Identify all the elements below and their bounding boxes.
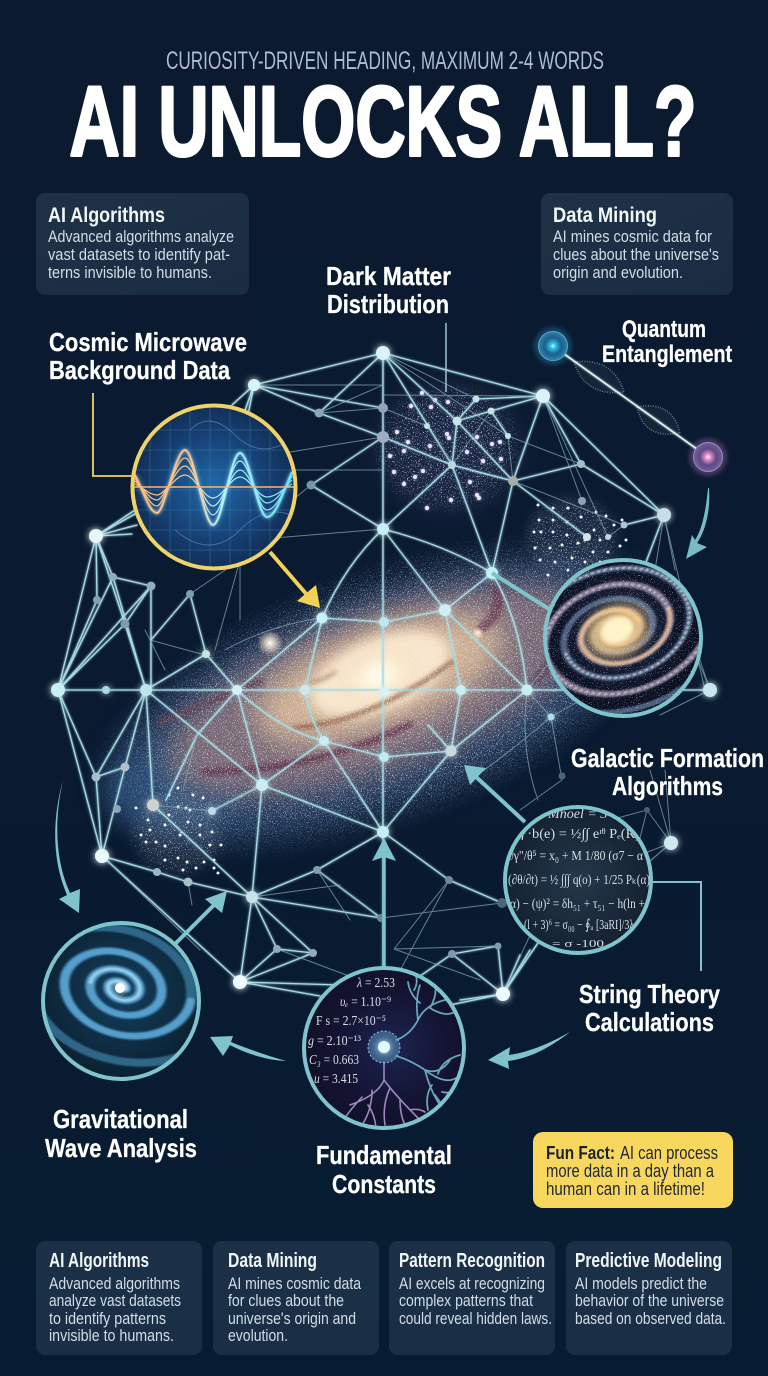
circle: string theory equations: α) − (ψ)² = δh₅₁ + τ₅₁ − h(ln + bbox=[510, 897, 645, 912]
card: Pattern Recognition bbox=[389, 1241, 555, 1355]
label: String Theory Calculations: Calculations bbox=[585, 1007, 714, 1037]
label: Gravitational Wave Analysis: Gravitational bbox=[53, 1104, 188, 1134]
label: Fundamental Constants bbox=[316, 1140, 452, 1199]
card: Predictive Modeling: AI models predict the bbox=[575, 1274, 707, 1293]
label: Dark Matter Distribution: Distribution bbox=[327, 289, 449, 319]
circle: galactic formation spiral bbox=[491, 558, 703, 718]
label: Galactic Formation Algorithms bbox=[571, 743, 764, 801]
cluster: dark matter distribution bbox=[371, 380, 524, 516]
card: Data Mining: for clues about the bbox=[228, 1291, 344, 1310]
arrow: constants to gravitational bbox=[210, 1036, 286, 1061]
label: Fundamental Constants: Fundamental bbox=[316, 1140, 452, 1170]
label: Cosmic Microwave Background Data: Cosmic Microwave bbox=[49, 327, 247, 357]
circle: string theory equations: ƒ·b(e) = ½∫∫ eᶦᶿ Pₑ(R) bbox=[520, 827, 640, 842]
leader line: string theory bbox=[652, 882, 701, 971]
label: String Theory Calculations: String Theory bbox=[579, 979, 720, 1009]
network graph edges bbox=[58, 353, 710, 1005]
circle: fundamental constants: g = 2.10⁻¹³ bbox=[308, 1034, 361, 1049]
circle: string theory equations: (l + 3)⁶ = σ₀₀ − ∮ᵤ [3aRI]/3λ bbox=[524, 918, 634, 933]
arrow: string theory to galaxy bbox=[464, 765, 525, 822]
circle: fundamental constants: υₑ = 1.10⁻⁹ bbox=[340, 995, 391, 1010]
card: Data Mining: AI mines cosmic data bbox=[228, 1274, 361, 1293]
panel: AI Algorithms top: AI Algorithms bbox=[48, 204, 165, 227]
card: Pattern Recognition: Pattern Recognition bbox=[399, 1250, 545, 1272]
panel: Data Mining top: origin and evolution. bbox=[553, 263, 683, 282]
label: Quantum Entanglement: Entanglement bbox=[602, 341, 732, 368]
label: Cosmic Microwave Background Data: Background Data bbox=[49, 355, 230, 385]
label: Fundamental Constants: Constants bbox=[332, 1169, 436, 1199]
title block bbox=[70, 47, 696, 176]
circle: gravitational wave spiral bbox=[41, 921, 201, 1081]
circle: string theory equations: = σ -100 bbox=[552, 938, 605, 950]
circle: fundamental constants: F s = 2.7×10⁻⁵ bbox=[316, 1014, 386, 1029]
leader line: Dark Matter bbox=[445, 323, 447, 392]
panel: AI Algorithms top: terns invisible to humans. bbox=[48, 263, 212, 282]
card: AI Algorithms: Advanced algorithms bbox=[49, 1274, 180, 1293]
label: Galactic Formation Algorithms: Algorithms bbox=[612, 771, 723, 801]
card: Data Mining: Data Mining bbox=[228, 1250, 317, 1272]
arrow: gravitational to center bbox=[175, 891, 227, 944]
circle: CMB waveform bbox=[130, 400, 300, 575]
circle: fundamental constants: λ = 2.53 bbox=[356, 976, 395, 991]
circle: string theory equations: (∂θ/∂t) = ½ ∫∫∫ q(o) + 1/25 Pₖ(α) bbox=[508, 873, 650, 888]
card: Predictive Modeling: based on observed data. bbox=[575, 1309, 726, 1328]
cluster: galaxy-side nodes bbox=[520, 490, 626, 580]
panel: Data Mining top bbox=[541, 193, 733, 295]
leader line: CMB bbox=[93, 393, 132, 476]
panel: AI Algorithms top bbox=[36, 193, 249, 295]
panel: AI Algorithms top: Advanced algorithms analyze bbox=[48, 227, 234, 246]
card: Pattern Recognition: AI excels at recognizing bbox=[399, 1274, 545, 1293]
label: Dark Matter Distribution: Dark Matter bbox=[326, 261, 451, 291]
circle: fundamental constants: C₃ = 0.663 bbox=[309, 1053, 359, 1068]
secondary network nodes bbox=[92, 396, 650, 958]
label: String Theory Calculations bbox=[579, 979, 720, 1037]
network graph nodes bbox=[51, 346, 717, 1001]
card: Pattern Recognition: could reveal hidden laws. bbox=[399, 1309, 552, 1328]
callout: fun fact: Fun Fact: bbox=[546, 1143, 615, 1163]
panel: AI Algorithms top: vast datasets to identify pat- bbox=[48, 245, 230, 264]
panel: Data Mining top: AI mines cosmic data for bbox=[553, 227, 712, 246]
circle: fundamental constants bbox=[304, 968, 464, 1128]
card: Predictive Modeling: Predictive Modeling bbox=[575, 1250, 722, 1272]
circle: string theory equations: ∂γ"/θ⁵ = x₀ + M 1/80 (σ7 − α bbox=[508, 849, 644, 864]
card: Pattern Recognition: complex patterns that bbox=[399, 1291, 533, 1310]
callout: fun fact: AI can process bbox=[620, 1143, 718, 1163]
label: Cosmic Microwave Background Data bbox=[49, 327, 247, 385]
card: Predictive Modeling: behavior of the universe bbox=[575, 1291, 724, 1310]
label: Dark Matter Distribution bbox=[326, 261, 451, 319]
arrow: quantum to galaxy bbox=[686, 488, 709, 559]
cluster: lower-left bbox=[125, 788, 230, 880]
circle: string theory equations: Mnoel = 3··· bbox=[547, 807, 618, 822]
card: AI Algorithms: invisible to humans. bbox=[49, 1326, 174, 1345]
panel: Data Mining top: clues about the universe's bbox=[553, 245, 719, 264]
arrow: left curve to gravitational bbox=[55, 780, 80, 913]
arrow: string theory to constants bbox=[488, 1032, 570, 1069]
label: Gravitational Wave Analysis: Wave Analysis bbox=[45, 1133, 197, 1163]
central spiral galaxy bbox=[88, 532, 655, 859]
card: AI Algorithms: AI Algorithms bbox=[49, 1250, 149, 1272]
card: Data Mining: universe's origin and bbox=[228, 1309, 356, 1328]
card: Predictive Modeling bbox=[566, 1241, 732, 1355]
icon: quantum entanglement bbox=[534, 327, 727, 476]
label: Gravitational Wave Analysis bbox=[45, 1104, 197, 1163]
card: AI Algorithms: analyze vast datasets bbox=[49, 1291, 181, 1310]
panel: Data Mining top: Data Mining bbox=[553, 204, 657, 227]
card: AI Algorithms: to identify patterns bbox=[49, 1309, 166, 1328]
label: Quantum Entanglement: Quantum bbox=[622, 316, 706, 343]
callout: fun fact: more data in a day than a bbox=[546, 1161, 715, 1181]
card: Data Mining bbox=[213, 1241, 379, 1355]
arrow: constants up to center bbox=[372, 838, 396, 968]
card: AI Algorithms bbox=[36, 1241, 202, 1355]
card: Data Mining: evolution. bbox=[228, 1326, 288, 1345]
circle: fundamental constants: u = 3.415 bbox=[314, 1072, 358, 1087]
callout: fun fact bbox=[533, 1132, 733, 1208]
circle: string theory equations bbox=[505, 807, 651, 953]
label: Quantum Entanglement bbox=[602, 316, 732, 368]
callout: fun fact: human can in a lifetime! bbox=[546, 1179, 705, 1199]
arrow: CMB to galaxy bbox=[270, 552, 320, 608]
